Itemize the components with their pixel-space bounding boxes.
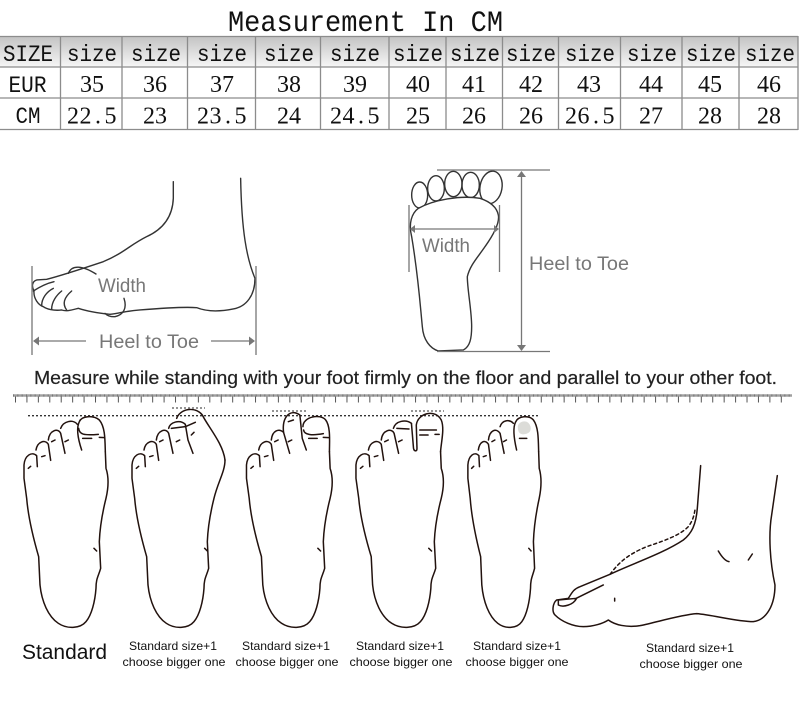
label: foot 5: choose bigger one [466, 655, 569, 669]
label: foot 2 [122, 639, 226, 669]
header row: size [264, 42, 314, 68]
foot: side view high instep [553, 466, 777, 627]
foot: long big toe [356, 413, 443, 627]
foot: big toe with nail [468, 417, 541, 627]
dotted toe reference line [28, 415, 540, 417]
measure lines [409, 170, 550, 352]
header row: size [131, 42, 181, 68]
header row: size [67, 42, 117, 68]
label: foot 4: Standard size+1 [356, 639, 444, 653]
EUR row: 37 [210, 72, 234, 98]
ruler band [13, 394, 792, 397]
EUR row: 39 [343, 72, 367, 98]
header row: size [197, 42, 247, 68]
foot: long second toe [246, 413, 332, 627]
label: width: Width [422, 236, 470, 257]
EUR row: 35 [80, 72, 104, 98]
sole outline and toes [410, 169, 505, 351]
label: foot 5: Standard size+1 [473, 639, 561, 653]
EUR row: 46 [757, 72, 781, 98]
table grid [0, 36, 798, 130]
size table [0, 36, 798, 130]
foot: long second toe bunion [132, 409, 225, 627]
label: side foot: choose bigger one [640, 657, 743, 671]
EUR row: 45 [698, 72, 722, 98]
EUR row: 40 [406, 72, 430, 98]
label: standard: Standard [22, 641, 107, 664]
CM row: 23 [143, 104, 167, 130]
CM row: 28 [757, 104, 781, 130]
EUR row: 42 [519, 72, 543, 98]
arrowheads [410, 171, 526, 351]
CM row: 23.5 [197, 104, 246, 130]
CM row: 25 [406, 104, 430, 130]
header row: size [745, 42, 795, 68]
CM row: 28 [698, 104, 722, 130]
EUR row: EUR [8, 73, 47, 99]
label: foot 3 [236, 639, 339, 669]
label: foot 5 [466, 639, 569, 669]
header row: size [506, 42, 556, 68]
CM row [16, 104, 781, 130]
heel to toe measure lines [32, 266, 256, 355]
CM row: 24 [277, 104, 301, 130]
label: foot 4 [350, 639, 453, 669]
label: width: Width [98, 276, 146, 297]
arrowheads [33, 336, 255, 346]
label: foot 2: Standard size+1 [129, 639, 217, 653]
CM row: 26.5 [565, 104, 614, 130]
ruler ticks [15, 396, 792, 402]
EUR row: 36 [143, 72, 167, 98]
short dotted marks [172, 408, 444, 411]
foot: standard [24, 417, 108, 627]
EUR row: 38 [277, 72, 301, 98]
side foot measurement diagram [32, 178, 256, 355]
EUR row: 43 [577, 72, 601, 98]
sole measurement diagram [409, 169, 629, 352]
label: heel to toe: Heel to Toe [99, 332, 199, 353]
title: Measurement In CM [228, 7, 503, 41]
CM row: 22.5 [67, 104, 116, 130]
side foot outline [32, 178, 255, 317]
label: foot 3: choose bigger one [236, 655, 339, 669]
header row [3, 42, 795, 68]
label: heel to toe: Heel to Toe [529, 254, 629, 275]
CM row: CM [16, 104, 40, 130]
label: foot 3: Standard size+1 [242, 639, 330, 653]
header row: size [686, 42, 736, 68]
EUR row: 41 [462, 72, 486, 98]
EUR row: 44 [639, 72, 663, 98]
label: foot 2: choose bigger one [122, 655, 226, 669]
measuring instruction: Measure while standing with your foot firmly on the floor and parallel to your other foot. [34, 368, 777, 388]
ruler [13, 396, 792, 400]
label: side foot: Standard size+1 [646, 641, 734, 655]
EUR row [8, 72, 781, 99]
header row: size [565, 42, 615, 68]
CM row: 26 [519, 104, 543, 130]
table header background [0, 37, 798, 67]
header row: size [330, 42, 380, 68]
header row: size [450, 42, 500, 68]
label: foot 4: choose bigger one [350, 655, 453, 669]
CM row: 26 [462, 104, 486, 130]
CM row: 24.5 [330, 104, 380, 130]
CM row: 27 [639, 104, 663, 130]
header row: size [627, 42, 677, 68]
header row: size [393, 42, 443, 68]
header row: SIZE [3, 42, 53, 68]
label: side foot [640, 641, 743, 671]
